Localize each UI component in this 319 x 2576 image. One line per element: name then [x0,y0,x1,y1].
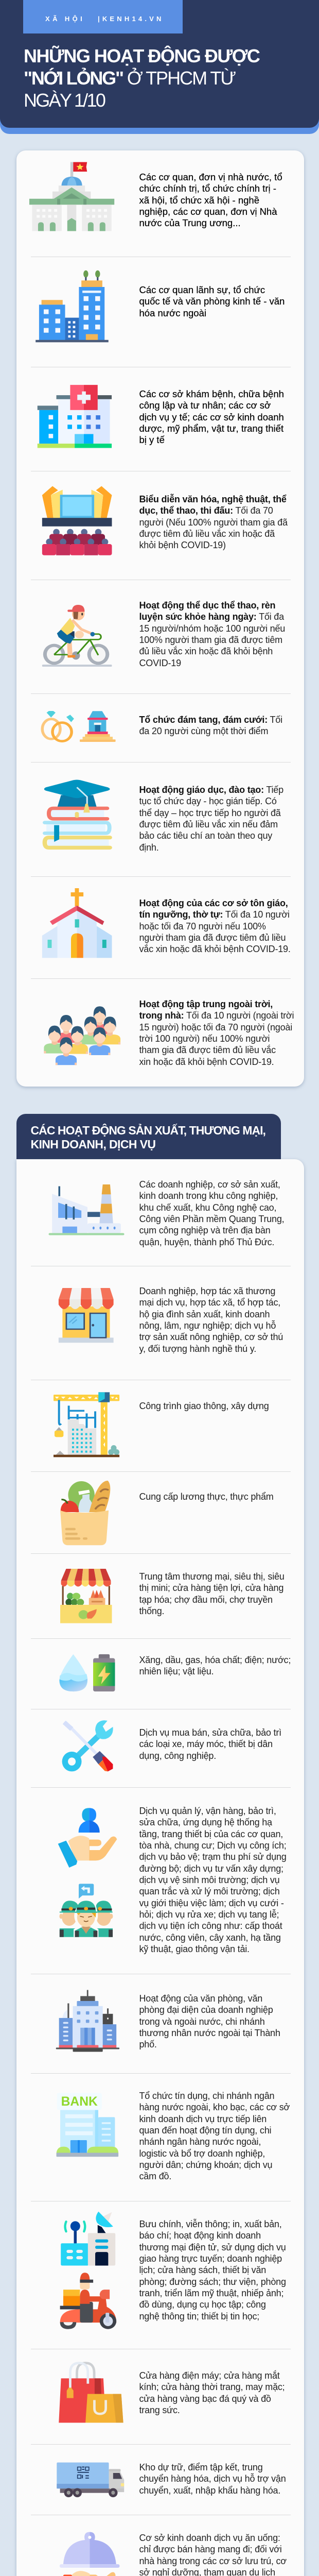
text: management and public services: nước, công viên, cây xanh, hạ tầng [139,1933,281,1943]
text: food service: nhà hàng trong các cơ sở lưu trú, cơ [139,2556,287,2566]
icon: church [42,888,112,958]
text: education: Hoạt động giáo dục, đào tạo: Tiếp [139,785,283,795]
icon: theater stage [42,486,112,555]
panel: production and business activities [16,1159,304,2576]
text: banking: Tổ chức tín dụng, chi nhánh ngân [139,2091,274,2101]
text: daily sports: đủ liều vắc xin hoặc đã khỏi bệnh [139,646,273,656]
text: group gatherings [139,999,294,1067]
text: management and public services: sửa chữa, ứng dụng hệ thống hạ [139,1817,272,1827]
text: post and telecom: tranh, triển lãm mỹ thuật, nhiếp ảnh; [139,2288,283,2298]
text: management and public services: kỹ thuật, giao thông vận tải. [139,1944,250,1954]
text: cooperatives: y, đối tượng hành nghề thú y. [139,1344,256,1354]
text: daily sports: 15 người/nhóm hoặc 100 người nếu [139,623,285,634]
text: post and telecom: thương mại điện tử, sử dụng dịch vụ [139,2242,286,2252]
icon: workers [59,1884,113,1937]
text: state agencies: chức chính trị, tổ chức chính trị - [139,183,276,194]
text: state agencies: Các cơ quan, đơn vị nhà nước, tổ [139,172,282,182]
text: medical facilities: dịch vụ y tế; các cơ sở kinh doanh [139,412,284,422]
text: religious activities: Hoạt động của các cơ sở tôn giáo, [139,898,288,908]
text: shops [139,2370,285,2415]
text: medical facilities [139,388,284,445]
title: NGÀY 1/10 [24,90,104,111]
text: performances: được tiêm đủ liều vắc xin hoặc đã [139,529,275,539]
text: religious activities: hoặc tối đa 70 người nếu 100% [139,921,266,931]
text: repair [139,1727,281,1761]
text: education: được tiêm đủ liều vắc xin nếu đảm [139,819,278,829]
icon: market stall [60,1569,112,1623]
text: enterprises: kinh doanh trong khu công nghiệp, [139,1191,278,1201]
text: group gatherings: tham gia đã được tiêm đủ liều vắc [139,1045,276,1055]
text: education [139,785,283,853]
text: medical facilities: bị y tế [139,434,165,445]
text: logistics: chuyển hàng hóa, dịch vụ hỗ trợ vận [139,2473,286,2484]
text: logistics: Kho dự trữ, điểm tập kết, trung [139,2462,263,2472]
category tag: |KENH14.VN [98,15,164,23]
text: group gatherings: trong nhà: Tối đa 10 người (ngoài trời [139,1010,294,1021]
text: consulates: quốc tế và văn phòng kinh tế - văn [139,296,285,307]
icon: factory [49,1184,125,1235]
icon: delivery truck [57,2463,124,2497]
text: post and telecom: đồ dùng, dụng cụ học tập; công [139,2299,266,2310]
icon: hospital [38,385,112,448]
text: performances: Biểu diễn văn hóa, nghệ thuật, thể [139,494,287,504]
text: shops: kính; cửa hàng thời trang, may mặc; [139,2382,285,2392]
text: banking: cầm đồ. [139,2171,171,2181]
text: performances: dục, thể thao, thi đấu: Tối đa 70 [139,505,273,516]
text: management and public services: tòa nhà, chung cư; Dịch vụ công ích; [139,1840,287,1851]
text: management and public services: dịch vụ vệ sinh môi trường; dịch vụ [139,1875,279,1885]
text: consulates: Các cơ quan lãnh sự, tổ chức [139,284,265,295]
header band [0,0,319,134]
text: food service: Cơ sở kinh doanh dịch vụ ăn uống: [139,2533,280,2543]
text: construction: Công trình giao thông, xây dựng [139,1401,269,1411]
text: repair: dụng, công nghiệp. [139,1751,216,1761]
text: daily sports: luyện sức khỏe hàng ngày: Tối đa [139,612,284,622]
text: group gatherings: 15 người) hoặc tối đa 70 người (ngoài [139,1022,292,1032]
icon: shop [59,1288,114,1343]
text: funerals and weddings: đa 20 người cùng một thời điểm [139,726,268,736]
text: offices: thương nhân nước ngoài tại Thành [139,2028,280,2038]
text: shops: cửa hàng vàng bạc đá quý và đồ [139,2394,271,2404]
icon: service hand with person [58,1808,117,1868]
text: religious activities: vắc xin hoặc đã khỏi bệnh COVID-19. [139,944,291,954]
icon: wrench and screwdriver [62,1720,113,1771]
text: religious activities: người tham gia đã được tiêm đủ liều [139,933,286,943]
text: medical facilities: công lập và tư nhân; các cơ sở [139,400,271,411]
text: retail: thống. [139,1606,164,1616]
icon: shopping bags [59,2363,123,2422]
text: offices [139,1993,280,2049]
text: post and telecom: lịch; cửa hàng sách, thiết bị văn [139,2265,266,2275]
text: management and public services [139,1806,287,1954]
text: cooperatives: Doanh nghiệp, hợp tác xã thương [139,1286,275,1296]
icon: cyclist [42,605,112,667]
text: education: tục tổ chức dạy - học gián tiếp. Có [139,796,277,806]
text: food supply: Cung cấp lương thực, thực phẩm [139,1492,274,1502]
text: management and public services: hỏi; dịch vụ rửa xe; dịch vụ tang lễ; [139,1909,279,1920]
text: retail: tạp hóa; chợ đầu mối, chợ truyền [139,1595,273,1605]
text: medical facilities: dược, mỹ phẩm, vật tư, trang thiết [139,423,283,434]
icon: telecom and delivery scooter [60,2212,116,2329]
text: management and public services: dịch vụ tiện ích công như: cấp thoát [139,1921,282,1931]
text: offices: trong và ngoài nước, chi nhánh [139,2016,265,2027]
text: repair: các loại xe, máy móc, thiết bị dân [139,1739,273,1749]
text: management and public services: đường bộ; dịch vụ tư vấn xây dựng; [139,1863,283,1874]
text: food service [139,2533,287,2576]
text: cooperatives: trợ sản xuất nông nghiệp, cơ sở thú [139,1332,283,1342]
text: enterprises: khu chế xuất, khu Công nghệ cao, [139,1202,276,1213]
text: management and public services: tầng, trang thiết bị của các cơ quan, [139,1829,283,1839]
text: enterprises: Các doanh nghiệp, cơ sở sản xuất, [139,1179,280,1190]
text: enterprises: cụm công nghiệp và trên địa bàn [139,1225,270,1235]
text: fuel and utilities: Xăng, dầu, gas, hóa chất; điện; nước; [139,1655,291,1665]
text: daily sports: 100% người tham gia đã được tiêm [139,635,282,645]
section heading tab [16,1114,281,1159]
text: post and telecom: giao hàng trực tuyến; doanh nghiệp [139,2253,282,2264]
text: cooperatives: mại dịch vụ, hợp tác xã, tổ hợp tác, [139,1297,280,1308]
section heading text: KINH DOANH, DỊCH VỤ [31,1138,155,1151]
text: banking: logistic và bổ trợ doanh nghiệp, [139,2148,265,2159]
text: enterprises: quận, huyện, thành phố Thủ Đức. [139,1237,274,1247]
text: post and telecom: nghệ thông tin; thiết bị tin học; [139,2311,259,2321]
text: retail: thị mini; cửa hàng tiện lợi, cửa hàng [139,1583,283,1593]
text: offices: Hoạt động của văn phòng, văn [139,1993,262,2004]
icon: government building [29,162,114,231]
text: group gatherings: trời 100 người) nếu 100% người [139,1033,270,1044]
text: consulates: hóa nước ngoài [139,308,206,318]
text: performances: khỏi bệnh COVID-19) [139,540,226,550]
text: shops: Cửa hàng điện máy; cửa hàng mắt [139,2370,280,2381]
text: state agencies: nước của Trung ương... [139,217,241,228]
text: performances [139,494,288,550]
text: cooperatives: nông, lâm, ngư nghiệp; dịch vụ hỗ [139,1320,276,1331]
icon: wedding rings and funeral house [42,711,116,742]
text: state agencies [139,172,282,229]
icon: water drop and battery [59,1654,115,1691]
text: education: thể dạy – học trực tiếp ho người đã [139,808,281,818]
text: fuel and utilities [139,1655,291,1676]
text: management and public services: dịch vụ bảo vệ; trạm thu phí sử dụng [139,1852,287,1862]
text: post and telecom: phòng; đường sách; thư viện, phòng [139,2277,286,2287]
icon: group of people [44,1006,120,1065]
text: offices: phố. [139,2039,157,2049]
text: enterprises: Công viên Phần mềm Quang Trung, [139,1214,284,1224]
text: religious activities: tín ngưỡng, thờ tự: Tối đa 10 người [139,909,290,920]
text: banking: hàng nước ngoài, kho bạc, các cơ sở [139,2102,290,2112]
panel: permitted public activities [16,150,304,1087]
text: banking: nhánh ngân hàng nước ngoài, [139,2137,261,2147]
icon: bank [57,2093,118,2157]
text: medical facilities: Các cơ sở khám bệnh, chữa bệnh [139,388,284,399]
title: NHỮNG HOẠT ĐỘNG ĐƯỢC [24,45,259,66]
text: education: định. [139,842,159,853]
text: food service: chỉ được bán hàng mang đi; đối với [139,2544,282,2554]
text: repair: Dịch vụ mua bán, sửa chữa, bảo trì [139,1727,281,1738]
text: shops: trang sức. [139,2405,180,2415]
title: "NỚI LỎNG" Ở TPHCM TỪ [24,67,235,89]
text: enterprises [139,1179,284,1247]
text: post and telecom: báo chí; hoạt động kinh doanh [139,2230,261,2241]
text: offices: phòng đại diện của doanh nghiệp [139,2005,273,2015]
text: group gatherings: Hoạt động tập trung ngoài trời, [139,999,273,1009]
icon: office buildings [36,270,109,342]
text: post and telecom: Bưu chính, viễn thông; in, xuất bản, [139,2219,282,2229]
text: daily sports: COVID-19 [139,658,181,668]
text: daily sports: Hoạt động thể dục thể thao, rèn [139,600,275,611]
text: cooperatives: hộ gia đình sản xuất, kinh doanh [139,1309,270,1319]
text: funerals and weddings [139,715,282,736]
text: management and public services: quan trắc và xử lý môi trường; dịch [139,1886,280,1896]
text: banking: quan đến hoạt động tín dụng, chi [139,2125,271,2136]
text: education: bảo các tiêu chí an toàn theo quy [139,831,272,841]
text: state agencies: nghiệp, các cơ quan, đơn vị Nhà [139,206,277,217]
title [24,45,260,111]
text: management and public services: Dịch vụ quản lý, vận hàng, bảo trì, [139,1806,276,1816]
text: daily sports [139,600,285,668]
category tag: XÃ HỘI [45,15,85,23]
icon: construction crane [54,1392,119,1457]
section heading text: CÁC HOẠT ĐỘNG SẢN XUẤT, THƯƠNG MẠI, [31,1124,265,1137]
icon: graduation cap and books [44,779,110,848]
text: post and telecom [139,2218,286,2321]
text: state agencies: xã hội, tổ chức xã hội - nghề [139,195,259,206]
text: religious activities [139,898,291,954]
text: funerals and weddings: Tổ chức đám tang, đám cưới: Tối [139,715,282,725]
text: banking: kinh doanh dịch vụ trực tiếp liên [139,2114,267,2124]
text: banking: người dân; chứng khoán; dịch vụ [139,2160,272,2170]
icon: bank: BANK [61,2094,98,2109]
text: performances: người (Nếu 100% người tham gia đã [139,517,288,528]
text: banking [139,2091,290,2181]
text: logistics [139,2462,286,2496]
text: logistics: chuyển, xuất, nhập khẩu hàng hóa. [139,2485,280,2496]
text: cooperatives [139,1286,283,1354]
text: retail: Trung tâm thương mại, siêu thị, siêu [139,1571,285,1582]
text: fuel and utilities: nhiên liệu; vật liệu. [139,1666,214,1676]
section heading text [31,1124,265,1151]
text: management and public services: vụ giới thiệu việc làm; dịch vụ cưới - [139,1898,284,1908]
text: consulates [139,284,285,318]
icon: office towers [56,1990,119,2052]
category tag [23,0,183,33]
icon: serving cloche [60,2532,119,2576]
icon: grocery bag [60,1481,110,1545]
text: group gatherings: xin hoặc đã khỏi bệnh COVID-19. [139,1057,274,1067]
text: retail [139,1571,285,1616]
